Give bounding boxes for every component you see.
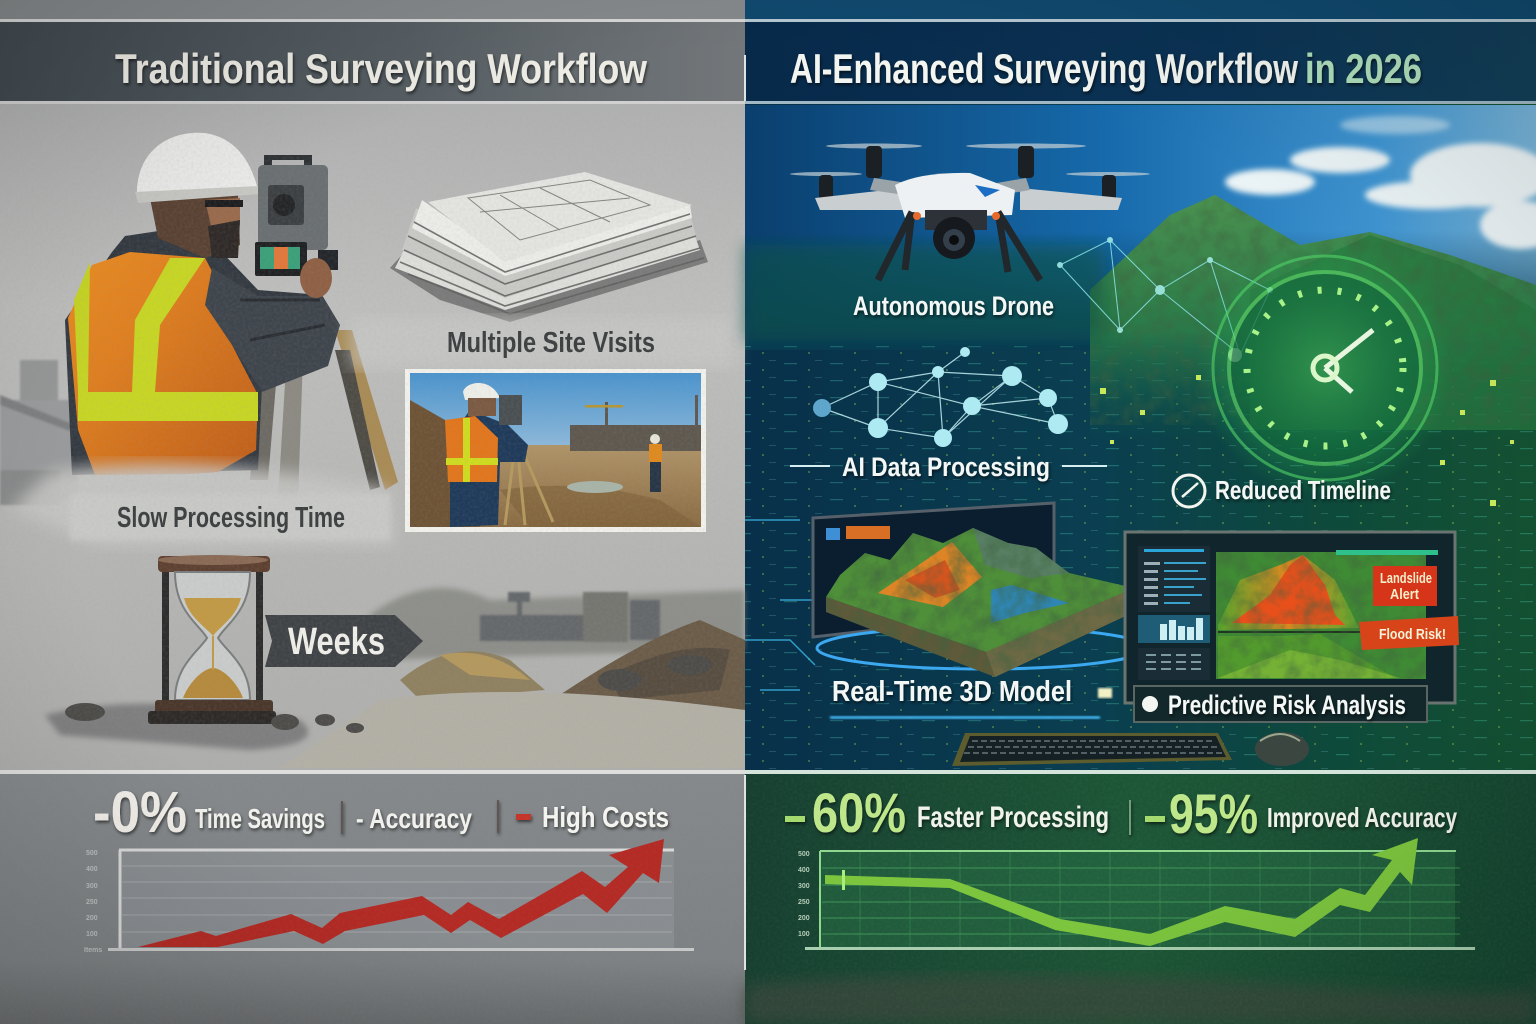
glowing data lights — [1100, 375, 1514, 506]
texture: bottom panel grain — [0, 775, 1536, 1024]
label: reduced timeline with clock icon — [1173, 475, 1391, 507]
sleeve — [205, 268, 340, 392]
center divider — [744, 55, 746, 970]
icon: keyboard — [952, 733, 1232, 766]
metrics row: -0% — [93, 780, 187, 845]
sidebar data panel — [1138, 546, 1210, 680]
glowing circuit traces — [745, 520, 815, 690]
chart: rising cost: 300 — [86, 883, 98, 890]
vest — [68, 252, 258, 475]
metrics row — [93, 780, 669, 845]
header: traditional title band — [0, 19, 745, 104]
panel: AI metrics — [745, 770, 1536, 1024]
chart: improving performance: 500 — [798, 851, 810, 858]
metrics row: 95% — [1169, 782, 1258, 845]
alert: landslide: Landslide — [1380, 570, 1432, 587]
label backdrop: multiple site visits — [350, 318, 735, 368]
chart: rising cost: 100 — [86, 931, 98, 938]
chart: rising cost: 500 — [86, 850, 98, 857]
texture: left scene grain — [0, 104, 745, 770]
metrics row: Time Savings — [195, 803, 325, 834]
neck and face — [150, 195, 240, 258]
rubble foreground — [65, 655, 712, 733]
alert: landslide: Alert — [1390, 586, 1419, 603]
label: slow processing time: Slow Processing Time — [117, 502, 345, 534]
illustration: surveyor with total station — [65, 133, 398, 500]
title accent: in 2026: in 2026 — [1305, 45, 1422, 92]
chart: rising cost: 200 — [86, 915, 98, 922]
photo tripod — [505, 445, 553, 525]
metrics row: - Accuracy — [356, 803, 472, 834]
chart: rising cost: 400 — [86, 866, 98, 873]
label: real-time 3D model: Real-Time 3D Model — [832, 676, 1072, 708]
alert: flood risk: Flood Risk! — [1379, 626, 1446, 643]
scene: quarry and distant construction — [45, 588, 745, 768]
body — [895, 173, 1015, 218]
hard hat — [137, 133, 258, 200]
chart: rising cost: Items — [84, 947, 102, 954]
rising red arrow — [138, 839, 664, 947]
green trend arrow — [825, 838, 1418, 946]
alert: landslide — [1373, 566, 1437, 606]
chart: rising cost — [84, 839, 694, 954]
label: predictive risk analysis — [1134, 686, 1427, 722]
hand — [300, 258, 332, 298]
chart: rising cost: 250 — [86, 899, 98, 906]
chart: improving performance: 400 — [798, 867, 810, 874]
metrics row — [785, 781, 1457, 845]
background: sky clouds — [1225, 116, 1536, 249]
metrics row: Improved Accuracy — [1267, 802, 1457, 833]
metrics row: Faster Processing — [917, 801, 1109, 834]
risk map — [1216, 550, 1438, 679]
chart: improving performance — [798, 838, 1475, 950]
monitor: real-time 3D model — [813, 503, 1147, 678]
arrow label: weeks — [265, 615, 423, 667]
label: multiple site visits: Multiple Site Visits — [447, 327, 655, 359]
label: reduced timeline with clock icon: Reduced Timeline — [1215, 475, 1391, 505]
label: AI data processing: AI Data Processing — [842, 452, 1050, 482]
arrow label: weeks: Weeks — [288, 621, 385, 663]
panel: traditional metrics — [0, 770, 745, 1024]
metrics row: High Costs — [542, 802, 669, 834]
jacket — [65, 230, 340, 475]
metrics row: 60% — [812, 781, 906, 844]
illustration: stack of survey plans — [390, 172, 708, 322]
label backdrop: slow processing time — [70, 494, 390, 540]
landing gear — [878, 212, 1040, 280]
photo: surveyor on construction site — [405, 369, 706, 532]
glowing base ring — [817, 627, 1147, 669]
total station — [255, 155, 338, 276]
photo distant worker — [649, 434, 662, 492]
chart: improving performance: 300 — [798, 883, 810, 890]
icon: green clock — [1197, 240, 1453, 496]
icon: hourglass — [148, 555, 276, 724]
header: AI title band — [745, 19, 1536, 104]
rotors — [790, 144, 1150, 176]
3D terrain block — [826, 528, 1134, 678]
icon: mouse — [1255, 732, 1309, 766]
photo surveyor — [445, 383, 528, 527]
panel: traditional workflow background — [0, 0, 745, 1024]
background: forest treeline left — [745, 245, 1105, 340]
panel: AI workflow background — [745, 0, 1536, 1024]
tripod — [250, 290, 398, 500]
chart: improving performance: 100 — [798, 931, 810, 938]
mist under surveyor — [10, 464, 395, 545]
camera — [933, 217, 975, 259]
chart: improving performance: 250 — [798, 899, 810, 906]
title: traditional: Traditional Surveying Workflow — [115, 45, 647, 92]
arms — [815, 188, 905, 210]
chart: improving performance: 200 — [798, 915, 810, 922]
alert: flood risk — [1359, 616, 1459, 650]
monitor: predictive risk analysis — [1125, 532, 1459, 703]
label: autonomous drone: Autonomous Drone — [853, 291, 1054, 321]
icon: autonomous drone — [790, 144, 1150, 280]
vest reflective stripes — [74, 258, 258, 421]
title: AI enhanced: AI-Enhanced Surveying Workflow — [790, 45, 1298, 92]
background: distant industrial plant — [0, 360, 78, 505]
background: green mountains — [1090, 195, 1536, 440]
icon: AI data processing network — [813, 347, 1068, 447]
label: predictive risk analysis: Predictive Risk Analysis — [1168, 690, 1406, 720]
network: mountain mesh overlay — [1057, 237, 1273, 362]
